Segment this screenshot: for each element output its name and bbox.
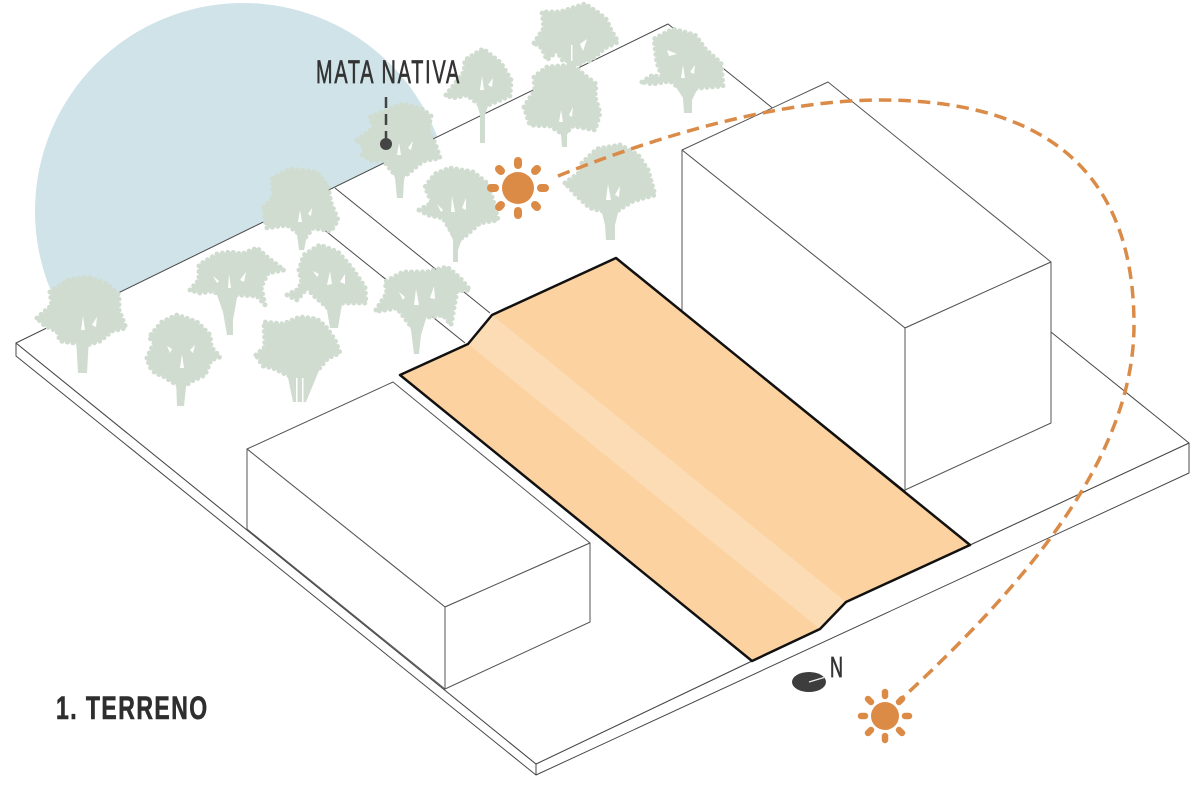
tree 10 xyxy=(446,49,511,143)
tree 3 xyxy=(190,248,284,335)
label: north: N xyxy=(830,652,843,684)
tree 7 xyxy=(376,267,470,354)
small neighbouring building xyxy=(247,382,590,689)
tree 12 xyxy=(534,4,618,66)
tree 9 xyxy=(419,168,498,262)
terrain plot xyxy=(400,258,970,661)
icon: upper sun xyxy=(491,161,545,215)
trees xyxy=(37,4,723,406)
plot outline xyxy=(400,258,970,661)
tree 13 xyxy=(565,145,655,240)
tree 2 xyxy=(147,315,220,406)
label: mata nativa: MATA NATIVA xyxy=(316,54,459,90)
leader line with dot xyxy=(380,97,392,150)
light central strip xyxy=(468,315,846,629)
title: 1. TERRENO xyxy=(56,690,207,726)
tree 14 xyxy=(642,29,723,113)
icon: north compass xyxy=(792,672,826,692)
native forest area circle xyxy=(35,3,437,292)
tree 1 xyxy=(37,277,126,373)
tree 5 xyxy=(287,245,366,328)
tree 4 xyxy=(256,317,340,402)
tree 8 xyxy=(357,104,440,198)
icon: lower sun xyxy=(861,692,909,740)
tall neighbouring building xyxy=(682,82,1051,491)
sun path arc xyxy=(558,100,1134,702)
tree 6 xyxy=(264,169,338,250)
tree 11 xyxy=(524,65,600,147)
